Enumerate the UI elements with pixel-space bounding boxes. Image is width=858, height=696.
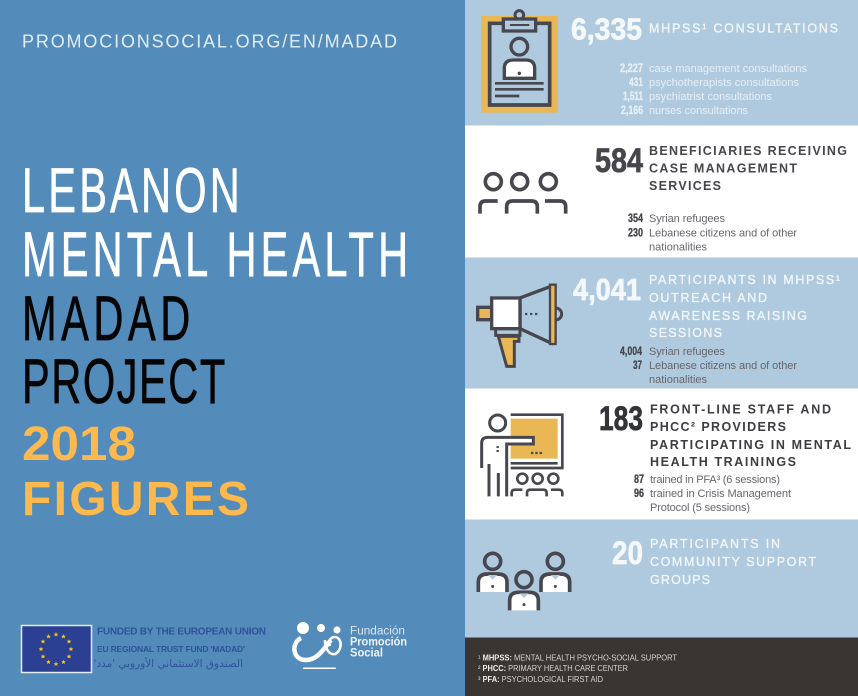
consultations breakdown: case management consultations xyxy=(649,63,808,75)
beneficiaries breakdown: nationalities xyxy=(649,242,708,254)
headline: 584 beneficiaries: 584 xyxy=(595,142,643,180)
headline: 4,041 participants: SESSIONS xyxy=(649,326,722,340)
footnote: MHPSS: ¹ MHPSS: MENTAL HEALTH PSYCHO-SOCIAL SUPPORT xyxy=(478,654,677,662)
consultations breakdown: psychiatrist consultations xyxy=(649,91,772,103)
headline: 6,335 MHPSS consultations: 6,335 xyxy=(571,12,642,46)
EU flag xyxy=(22,626,92,672)
headline: 4,041 participants: OUTREACH AND xyxy=(649,291,767,305)
title xyxy=(22,157,408,417)
panel: MHPSS consultations xyxy=(465,0,858,126)
logo text: Fundación xyxy=(350,626,405,638)
footnote: PFA: ³ PFA: PSYCHOLOGICAL FIRST AID xyxy=(478,675,603,684)
headline: 584 beneficiaries: BENEFICIARIES RECEIVING xyxy=(649,144,847,158)
headline: 183 staff and providers xyxy=(599,400,851,469)
headline: 4,041 participants: 4,041 xyxy=(573,272,641,307)
consultations breakdown: nurses consultations xyxy=(649,105,748,117)
headline: 20 participants xyxy=(612,535,816,587)
headline: 20 participants: 20 xyxy=(612,535,643,571)
panel: footnotes xyxy=(465,638,858,696)
website url: PROMOCIONSOCIAL.ORG/EN/MADAD xyxy=(22,32,397,52)
panel: mental health trainings xyxy=(465,388,858,520)
icon: trainer at board xyxy=(482,415,562,496)
subtitle: 2018 figures: 2018 xyxy=(22,418,136,471)
EU funding text: FUNDED BY THE EUROPEAN UNION xyxy=(97,626,266,638)
consultations breakdown: 2,166 xyxy=(621,105,643,117)
beneficiaries breakdown: Lebanese citizens and of other xyxy=(649,228,797,240)
headline: 183 staff and providers: PARTICIPATING IN MENTAL xyxy=(650,438,851,452)
icon: community group xyxy=(478,553,570,610)
trainings breakdown: trained in PFA³ (6 sessions) xyxy=(650,474,780,486)
consultations breakdown: 1,511 xyxy=(623,91,643,103)
panel: case management beneficiaries xyxy=(465,126,858,258)
headline: 584 beneficiaries: SERVICES xyxy=(649,179,721,193)
beneficiaries breakdown xyxy=(628,213,797,254)
headline: 183 staff and providers: HEALTH TRAININGS xyxy=(650,455,796,469)
icon: three people xyxy=(480,174,566,214)
title: PROJECT xyxy=(22,348,225,417)
EU funding text: الصندوق الاستئماني الأوروبي 'مدد' xyxy=(94,657,243,670)
trainings breakdown xyxy=(634,474,791,514)
beneficiaries breakdown: 354 xyxy=(628,213,643,225)
panel: community support groups xyxy=(465,520,858,638)
headline: 183 staff and providers: PHCC² PROVIDERS xyxy=(650,420,786,434)
headline: 4,041 participants: PARTICIPANTS IN MHPSS¹ xyxy=(649,273,840,287)
icon: megaphone xyxy=(478,285,562,366)
headline: 6,335 MHPSS consultations: MHPSS¹ CONSULTATIONS xyxy=(649,22,838,36)
footnote: PHCC: ² PHCC: PRIMARY HEALTH CARE CENTER xyxy=(478,664,628,673)
headline: 584 beneficiaries: CASE MANAGEMENT xyxy=(649,162,797,176)
headline: 183 staff and providers: FRONT-LINE STAFF AND xyxy=(650,402,831,416)
consultations breakdown: psychotherapists consultations xyxy=(649,77,800,89)
title: MADAD xyxy=(22,285,190,354)
headline: 183 staff and providers: 183 xyxy=(599,400,643,438)
headline: 6,335 MHPSS consultations xyxy=(571,12,838,46)
subtitle: 2018 figures: FIGURES xyxy=(22,473,249,526)
headline: 20 participants: PARTICIPANTS IN xyxy=(650,537,780,551)
EU funding logo xyxy=(22,626,266,672)
panel: outreach and awareness sessions xyxy=(465,258,858,388)
headline: 20 participants: COMMUNITY SUPPORT xyxy=(650,555,816,569)
title: MENTAL HEALTH xyxy=(22,221,408,290)
participants breakdown: Lebanese citizens and of other xyxy=(649,360,797,372)
headline: 4,041 participants xyxy=(573,272,840,340)
trainings breakdown: Protocol (5 sessions) xyxy=(650,502,750,514)
headline: 584 beneficiaries xyxy=(595,142,847,193)
subtitle: 2018 figures xyxy=(22,418,249,526)
title: LEBANON xyxy=(22,157,240,226)
consultations breakdown: 2,227 xyxy=(620,63,643,75)
trainings breakdown: trained in Crisis Management xyxy=(650,488,791,500)
participants breakdown: 4,004 xyxy=(620,346,642,358)
participants breakdown: nationalities xyxy=(649,374,708,386)
logo mark xyxy=(294,622,341,669)
trainings breakdown: 87 xyxy=(634,474,644,486)
logo text: Social xyxy=(350,648,383,660)
participants breakdown: 37 xyxy=(633,360,642,372)
consultations breakdown: 431 xyxy=(629,77,643,89)
beneficiaries breakdown: 230 xyxy=(628,228,643,240)
logo text xyxy=(350,626,407,660)
headline: 20 participants: GROUPS xyxy=(650,573,710,587)
headline: 4,041 participants: AWARENESS RAISING xyxy=(649,309,807,323)
panel: left title panel xyxy=(0,0,465,696)
EU funding text: EU REGIONAL TRUST FUND 'MADAD' xyxy=(97,644,245,654)
EU funding text xyxy=(94,626,266,670)
consultations breakdown xyxy=(620,63,808,117)
trainings breakdown: 96 xyxy=(634,488,644,500)
Fundación Promoción Social logo xyxy=(294,622,407,669)
logo text: Promoción xyxy=(350,636,407,648)
beneficiaries breakdown: Syrian refugees xyxy=(649,213,726,225)
participants breakdown xyxy=(620,346,797,386)
icon: clipboard xyxy=(481,11,558,113)
participants breakdown: Syrian refugees xyxy=(649,346,726,358)
